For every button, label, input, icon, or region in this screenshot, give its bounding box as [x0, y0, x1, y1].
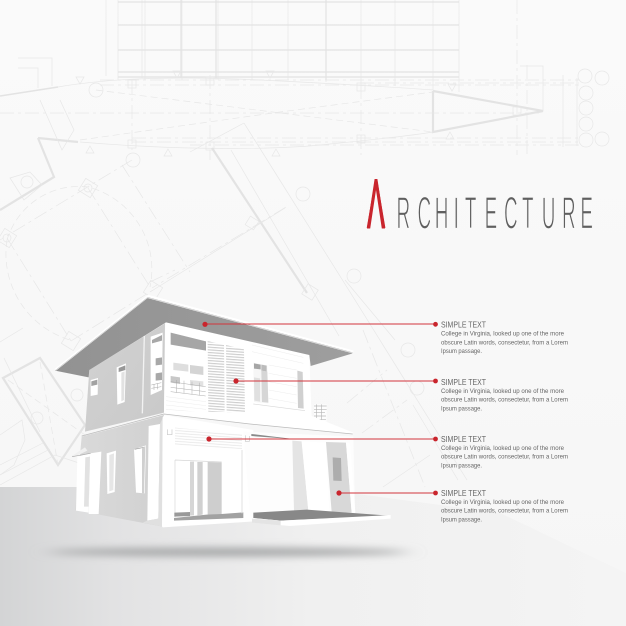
carport interior: [243, 432, 355, 522]
title: E: [485, 189, 497, 239]
roof underside: [55, 298, 353, 377]
title: R: [396, 189, 410, 239]
callout 2: upper floor: obscure Latin words, consectetur, from a Lorem: [441, 397, 568, 404]
blueprint drawing: top elevation grid: [106, 0, 527, 155]
house illustration: [55, 296, 391, 527]
louvers right: [226, 345, 245, 416]
callout 2: upper floor: [233, 378, 568, 412]
title: E: [580, 189, 593, 239]
callout 1: roof: SIMPLE TEXT: [441, 320, 486, 330]
vent louvers lower: [175, 428, 242, 449]
upper balcony window: [171, 362, 206, 396]
callout 4: gate wall: obscure Latin words, consectetur, from a Lorem: [441, 508, 568, 515]
sliding door glass: [174, 460, 243, 521]
blueprint drawing: rotated floor plan: [0, 123, 467, 487]
gate wall: [326, 442, 352, 513]
upper corner white column: [151, 333, 163, 395]
wall seam: [142, 336, 144, 413]
title: C: [504, 189, 518, 239]
callout 1: roof: obscure Latin words, consectetur, from a Lorem: [441, 339, 568, 346]
callout 3: ground floor: SIMPLE TEXT: [441, 435, 486, 444]
slab top: [253, 510, 390, 521]
corner railing: [151, 383, 161, 390]
door frame right: [240, 450, 243, 513]
lower side window 2: [134, 445, 146, 493]
side entry canopy: [72, 447, 101, 514]
callout 3: ground floor: [206, 435, 568, 469]
title: C: [417, 189, 431, 239]
slab left shade: [252, 519, 281, 525]
callout 4: gate wall: Ipsum passage.: [441, 516, 482, 523]
floating house shadow: [48, 548, 408, 556]
siding lines: [166, 345, 303, 413]
small marks: [167, 429, 249, 441]
lower side window 1: [107, 451, 116, 494]
title: T: [522, 189, 534, 239]
callout 4: gate wall: College in Virginia, looked up one of the more: [441, 499, 565, 506]
title: T: [465, 189, 476, 239]
column shadow: [143, 415, 164, 527]
carport right wall: [302, 441, 329, 512]
right railing: [314, 404, 327, 424]
callout 1: roof: [202, 320, 568, 355]
small side window: [91, 378, 98, 396]
gate vent: [333, 457, 342, 481]
title: I: [454, 189, 459, 239]
callout 2: upper floor: Ipsum passage.: [441, 405, 482, 412]
title: A: [366, 166, 386, 244]
upper floor slab band: [164, 411, 353, 434]
callout 4: gate wall: [336, 489, 568, 523]
upper front wall: [164, 322, 312, 417]
upper left wall: [85, 323, 165, 432]
callout 2: upper floor: College in Virginia, looked up one of the more: [441, 388, 565, 395]
front corner: [162, 415, 164, 527]
callout 4: gate wall: SIMPLE TEXT: [441, 489, 486, 498]
callout 3: ground floor: obscure Latin words, consectetur, from a Lorem: [441, 454, 568, 461]
carport pillar: [292, 441, 308, 511]
gate side strip: [346, 443, 355, 513]
callout 1: roof: Ipsum passage.: [441, 348, 482, 355]
tall lower column: [147, 424, 160, 521]
title: U: [542, 189, 555, 239]
right window: [253, 363, 305, 411]
slab shadow lines: [82, 414, 353, 436]
lower left wall: [75, 415, 164, 527]
callout 3: ground floor: Ipsum passage.: [441, 462, 482, 469]
title: R: [562, 189, 576, 239]
balcony openings: [152, 335, 162, 381]
callout 1: roof: College in Virginia, looked up one of the more: [441, 331, 565, 338]
title: [366, 166, 593, 244]
carport ceiling shadow: [251, 434, 297, 439]
roof edge line: [55, 297, 353, 371]
tall side window: [117, 363, 126, 405]
lower front wall: [163, 415, 253, 527]
slab white edge: [253, 515, 391, 526]
roof fascia: [55, 296, 353, 370]
louvers left: [208, 341, 225, 413]
callout 2: upper floor: SIMPLE TEXT: [441, 378, 486, 387]
blueprint drawing: lens plan: [0, 58, 609, 395]
title: H: [435, 189, 448, 239]
callout 3: ground floor: College in Virginia, looked up one of the more: [441, 445, 565, 452]
floor plane: [0, 487, 626, 626]
upper band grey: [171, 333, 206, 351]
